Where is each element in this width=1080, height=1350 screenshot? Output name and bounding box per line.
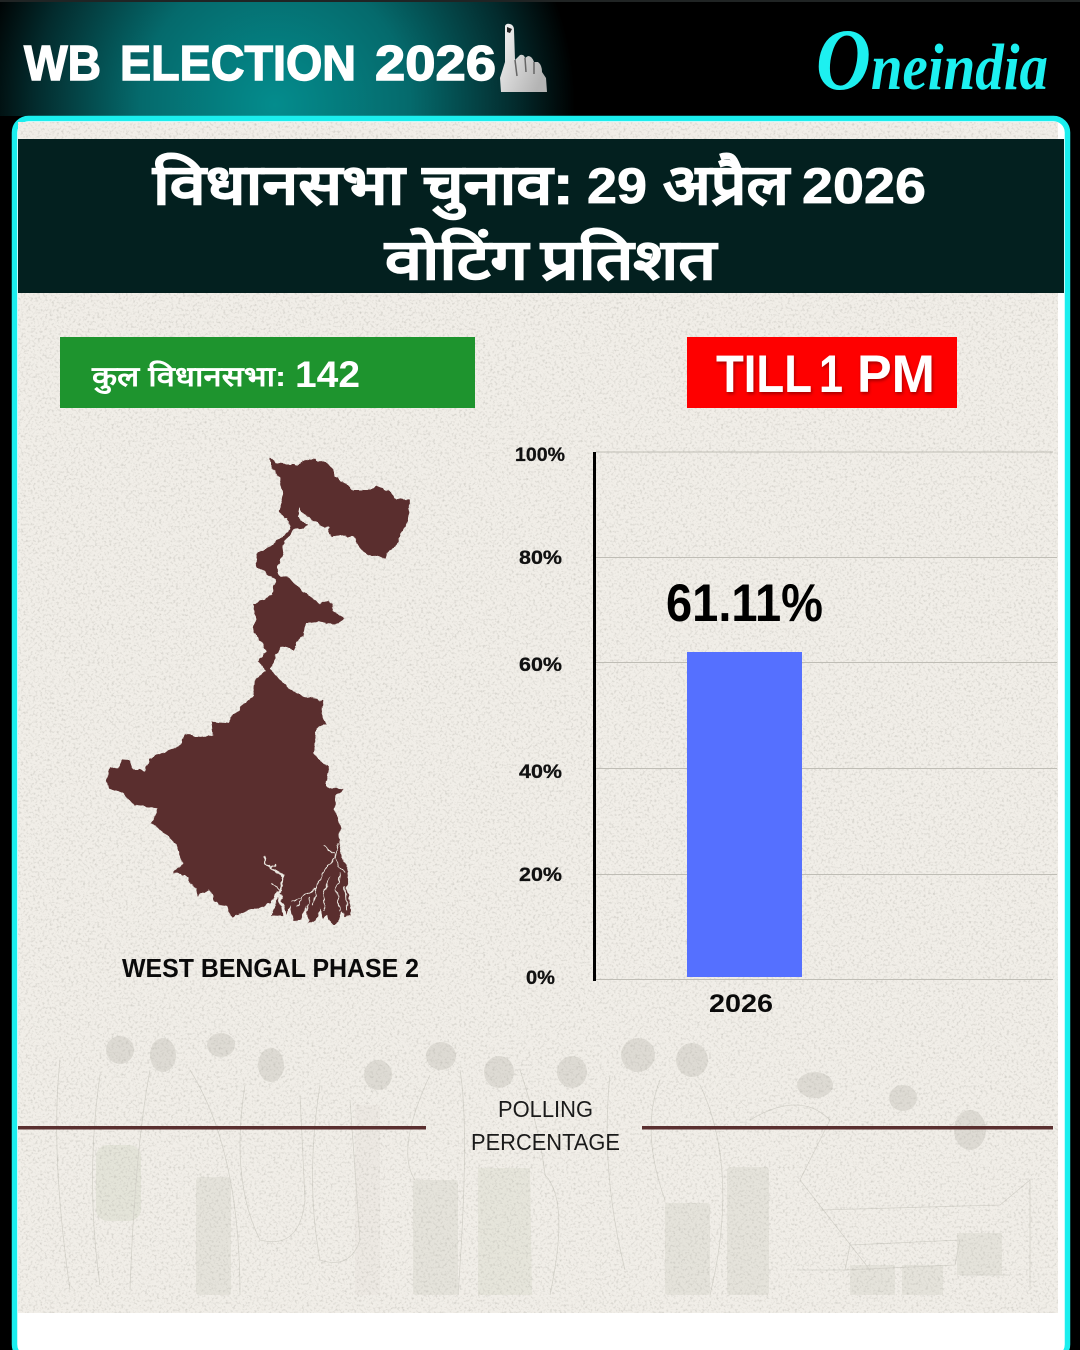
logo: Oneindia: Oneindia xyxy=(816,12,1048,109)
chart y-axis labels: 0% xyxy=(526,967,555,989)
time badge xyxy=(687,337,957,408)
bar value: 61.11% xyxy=(666,574,823,633)
header band xyxy=(0,0,1080,116)
total assembly seats badge xyxy=(60,337,475,408)
divider caption: PERCENTAGE xyxy=(471,1129,620,1155)
chart y-axis labels: 100% xyxy=(515,444,565,466)
map caption: WEST BENGAL PHASE 2 xyxy=(122,953,419,983)
header title: 2026 xyxy=(375,37,496,91)
divider caption xyxy=(471,1096,620,1155)
chart y-axis labels: 60% xyxy=(519,654,562,676)
icon: inked voting finger xyxy=(500,24,547,92)
total assembly seats badge: 142 xyxy=(295,354,360,395)
heading text: 2026 xyxy=(802,158,926,214)
bar chart: voting percentage xyxy=(515,444,1057,1018)
polling percentage divider xyxy=(18,1096,1053,1155)
heading text: प्रतिशत xyxy=(540,227,718,291)
header title: ELECTION xyxy=(120,37,356,91)
heading text: विधानसभा चुनाव: xyxy=(152,152,574,220)
divider caption: POLLING xyxy=(498,1096,593,1122)
chart y-axis labels: 20% xyxy=(519,864,562,886)
heading text: 29 xyxy=(587,158,647,214)
map: West Bengal xyxy=(107,457,409,923)
time badge: TILL xyxy=(716,345,812,404)
crowd: body outlines xyxy=(57,1060,1030,1295)
bar: 2026 xyxy=(687,652,802,977)
chart y-axis labels xyxy=(515,444,565,989)
bar category label: 2026 xyxy=(709,990,773,1018)
heading text: वोटिंग xyxy=(384,227,531,291)
heading band xyxy=(18,139,1064,293)
total assembly seats badge: कुल विधानसभा: xyxy=(91,360,286,394)
crowd: heads xyxy=(106,1033,986,1150)
time badge: PM xyxy=(857,345,935,404)
header title xyxy=(24,37,496,91)
chart axis xyxy=(593,452,596,981)
header title: WB xyxy=(24,37,101,91)
time badge: 1 xyxy=(819,345,843,404)
heading text: अप्रैल xyxy=(663,152,791,216)
faint crowd of voters illustration xyxy=(57,1033,1030,1295)
crowd: legs and clothing xyxy=(96,1105,1002,1295)
heading text xyxy=(152,152,926,291)
chart y-axis labels: 40% xyxy=(519,761,562,783)
chart y-axis labels: 80% xyxy=(519,547,562,569)
